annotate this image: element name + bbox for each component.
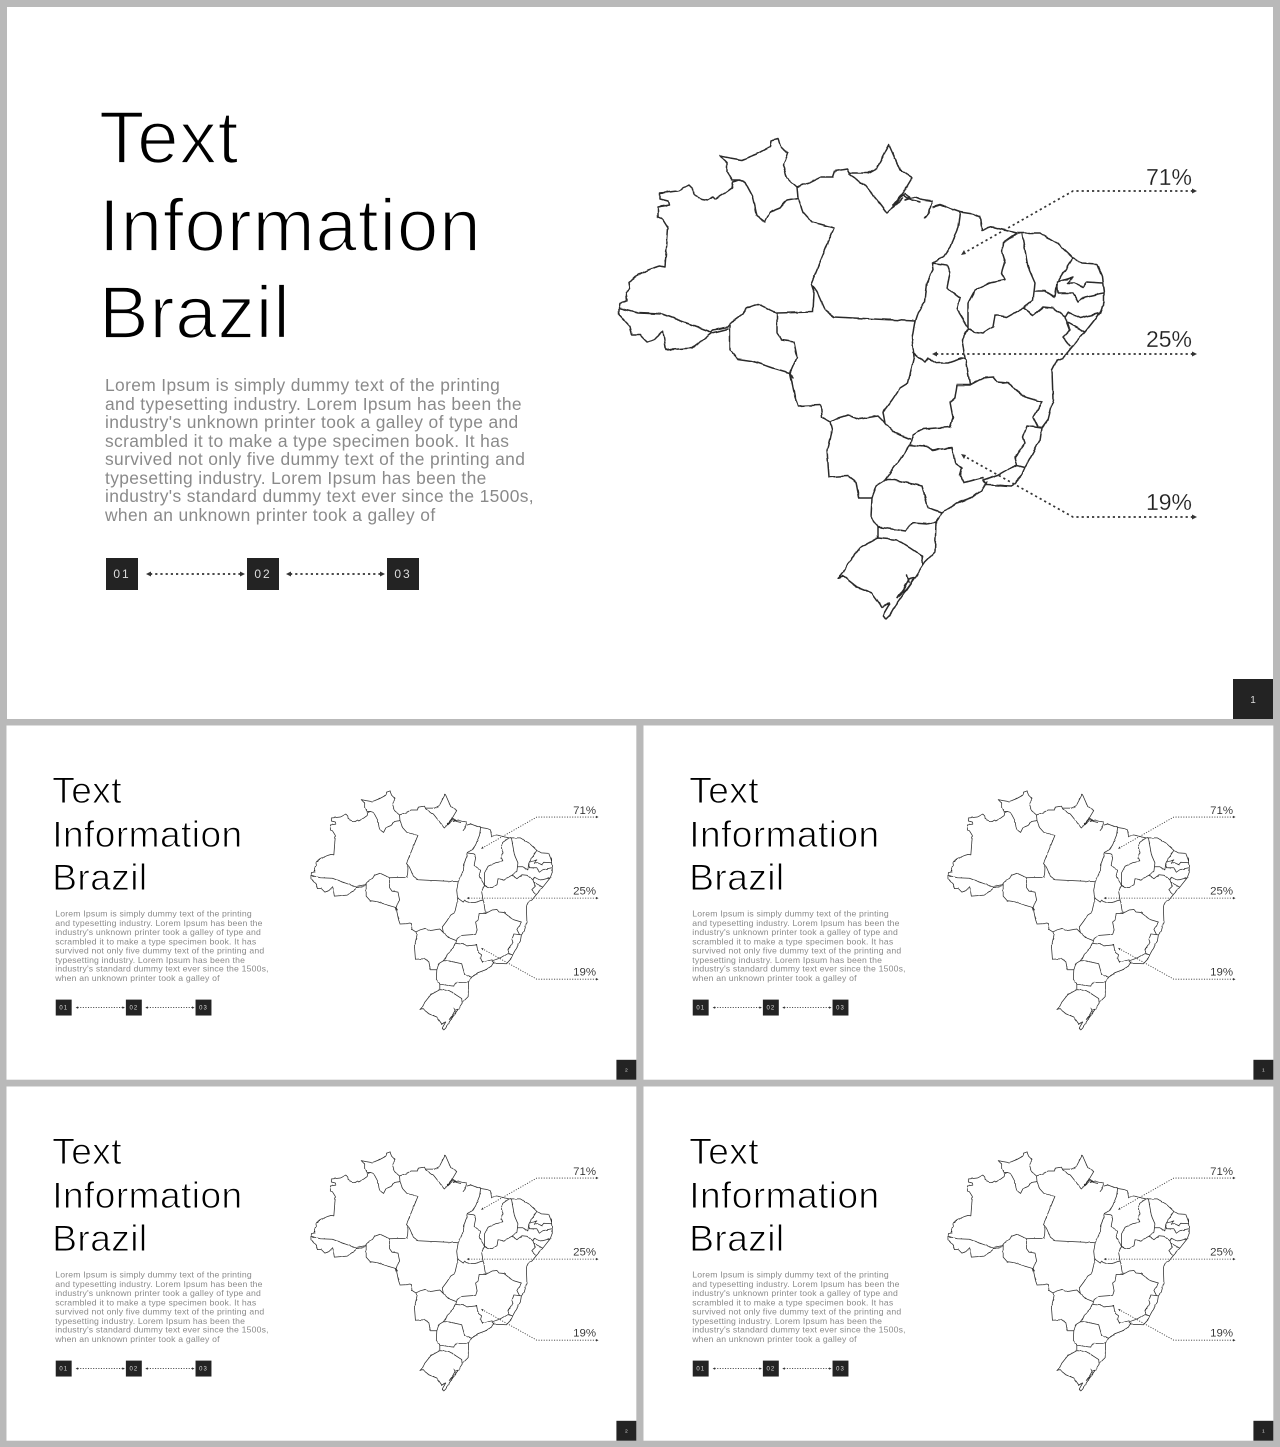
title [689, 770, 880, 898]
panel: thumbnail slide 3 [644, 726, 1274, 1080]
title [689, 1131, 880, 1259]
text block: and typesetting industry. Lorem Ipsum has been the [692, 918, 900, 928]
callout 71% [481, 1166, 599, 1210]
text block: Lorem Ipsum is simply dummy text of the printing [55, 909, 252, 919]
step 01: 01 [696, 1004, 705, 1011]
brazil map [311, 1152, 552, 1391]
text block: when an unknown printer took a galley of [105, 504, 436, 524]
page number: 1 [1262, 1068, 1265, 1073]
text block: and typesetting industry. Lorem Ipsum has been the [55, 1279, 263, 1289]
callout 25% [467, 1247, 599, 1260]
text block: scrambled it to make a type specimen book. It has [105, 430, 509, 450]
step 03 [387, 558, 419, 590]
map chart with callouts [712, 1152, 1236, 1392]
text block: survived not only five dummy text of the printing and [55, 1306, 264, 1316]
title: Text [99, 96, 239, 179]
step 01 [56, 1361, 72, 1377]
callout 71%: 71% [1210, 805, 1233, 817]
callout 71%: 71% [1146, 164, 1192, 190]
step 03: 03 [199, 1004, 208, 1011]
step arrows [713, 1367, 832, 1370]
title: Brazil [52, 1218, 148, 1259]
callout 71% [1118, 1166, 1236, 1210]
title: Information [689, 1174, 880, 1216]
step 02: 02 [767, 1365, 775, 1372]
step 01 [56, 1000, 72, 1016]
text block: industry's standard dummy text ever since the 1500s, [692, 964, 906, 974]
callout 71%: 71% [573, 805, 596, 817]
callout 19% [1118, 948, 1236, 980]
text block: when an unknown printer took a galley of [692, 973, 857, 983]
panel: thumbnail slide 4 [6, 1086, 636, 1441]
step 03: 03 [836, 1004, 845, 1011]
text block: and typesetting industry. Lorem Ipsum has been the [692, 1279, 900, 1289]
text block: industry's unknown printer took a galley of type and [692, 1288, 898, 1298]
text block: Lorem Ipsum is simply dummy text of the printing [105, 375, 500, 395]
callout 71% [1118, 805, 1236, 849]
callout 19%: 19% [1210, 1328, 1233, 1340]
text block: survived not only five dummy text of the printing and [692, 1306, 901, 1316]
map chart with callouts [76, 1152, 598, 1392]
callout 19% [481, 948, 599, 980]
panel: main slide [7, 7, 1273, 719]
step 01: 01 [696, 1365, 705, 1372]
callout 25%: 25% [573, 1247, 596, 1259]
step 01: 01 [59, 1004, 68, 1011]
panel: thumbnail slide 2 [6, 726, 636, 1080]
step 03 [196, 1361, 211, 1377]
step 02: 02 [254, 567, 272, 581]
title: Information [99, 184, 482, 266]
page number [1253, 1421, 1273, 1441]
title: Text [689, 770, 759, 811]
title [99, 96, 482, 354]
callout 25% [1104, 886, 1236, 899]
title: Information [689, 813, 880, 855]
step 02: 02 [767, 1004, 775, 1011]
text block: industry's standard dummy text ever since the 1500s, [55, 964, 269, 974]
title: Text [52, 770, 122, 811]
callout 25%: 25% [1210, 886, 1233, 898]
text block: scrambled it to make a type specimen book. It has [692, 936, 893, 946]
step 01 [106, 558, 138, 590]
page number: 2 [625, 1429, 628, 1434]
text block: industry's standard dummy text ever since the 1500s, [692, 1325, 906, 1335]
page number: 2 [625, 1068, 628, 1073]
brazil map [619, 139, 1104, 619]
step 02: 02 [130, 1365, 138, 1372]
callout 25% [1104, 1247, 1236, 1260]
step 02 [126, 1361, 142, 1377]
text block: typesetting industry. Lorem Ipsum has been the [55, 955, 245, 965]
step 02 [126, 1000, 142, 1016]
text block [692, 1270, 906, 1344]
page number [616, 1421, 636, 1441]
step arrows [713, 1006, 832, 1009]
text block: typesetting industry. Lorem Ipsum has been the [692, 1316, 882, 1326]
page number: 1 [1250, 695, 1256, 706]
callout 71% [481, 805, 599, 849]
step 03: 03 [394, 567, 412, 581]
callout 19% [961, 454, 1197, 520]
callout 25%: 25% [1210, 1247, 1233, 1259]
text block: when an unknown printer took a galley of [55, 973, 220, 983]
callout 71% [961, 164, 1197, 255]
text block: survived not only five dummy text of the printing and [55, 945, 264, 955]
step 01: 01 [113, 567, 131, 581]
text block: scrambled it to make a type specimen book. It has [55, 936, 256, 946]
text block: industry's unknown printer took a galley of type and [55, 1288, 261, 1298]
callout 19%: 19% [1146, 489, 1192, 515]
map chart with callouts [712, 790, 1236, 1030]
page number: 1 [1262, 1429, 1265, 1434]
step 02 [247, 558, 279, 590]
text block: scrambled it to make a type specimen book. It has [55, 1297, 256, 1307]
step 02 [763, 1000, 779, 1016]
text block: scrambled it to make a type specimen book. It has [692, 1297, 893, 1307]
text block [55, 909, 269, 983]
page number [616, 1060, 636, 1080]
step 03: 03 [199, 1365, 208, 1372]
brazil map [948, 791, 1189, 1030]
callout 25% [467, 886, 599, 899]
brazil map [311, 791, 552, 1030]
text block: survived not only five dummy text of the printing and [692, 945, 901, 955]
title: Brazil [52, 857, 148, 898]
callout 19%: 19% [573, 967, 596, 979]
panel: thumbnail slide 5 [644, 1086, 1274, 1441]
callout 19%: 19% [1210, 967, 1233, 979]
title [52, 1131, 243, 1259]
step 01 [693, 1000, 709, 1016]
text block: industry's standard dummy text ever since the 1500s, [55, 1325, 269, 1335]
text block: and typesetting industry. Lorem Ipsum has been the [55, 918, 263, 928]
text block: typesetting industry. Lorem Ipsum has been the [105, 468, 487, 488]
callout 19% [1118, 1309, 1236, 1341]
brazil map [948, 1152, 1189, 1391]
step 03 [196, 1000, 211, 1016]
step 02 [763, 1361, 779, 1377]
title: Text [689, 1131, 759, 1172]
title [52, 770, 243, 898]
callout 71%: 71% [1210, 1166, 1233, 1178]
text block [55, 1270, 269, 1344]
callout 25%: 25% [573, 886, 596, 898]
text block: Lorem Ipsum is simply dummy text of the printing [692, 1270, 889, 1280]
text block: industry's standard dummy text ever since the 1500s, [105, 486, 534, 506]
text block: industry's unknown printer took a galley of type and [55, 927, 261, 937]
step 01 [693, 1361, 709, 1377]
text block: survived not only five dummy text of the printing and [105, 449, 525, 469]
step arrows [76, 1006, 195, 1009]
text block: Lorem Ipsum is simply dummy text of the printing [692, 909, 889, 919]
step 02: 02 [130, 1004, 138, 1011]
text block: industry's unknown printer took a galley of type and [692, 927, 898, 937]
text block: and typesetting industry. Lorem Ipsum has been the [105, 394, 522, 414]
text block [692, 909, 906, 983]
callout 19% [481, 1309, 599, 1341]
map chart with callouts [76, 790, 598, 1030]
page number [1253, 1060, 1273, 1080]
step 03 [833, 1361, 848, 1377]
text block: industry's unknown printer took a galley of type and [105, 412, 519, 432]
title: Brazil [689, 1218, 785, 1259]
text block: when an unknown printer took a galley of [55, 1334, 220, 1344]
page number [1233, 679, 1273, 719]
text block: typesetting industry. Lorem Ipsum has been the [55, 1316, 245, 1326]
title: Text [52, 1131, 122, 1172]
step 01: 01 [59, 1365, 68, 1372]
step arrows [146, 572, 385, 576]
text block [105, 375, 534, 524]
title: Information [52, 1174, 243, 1216]
title: Brazil [99, 271, 291, 354]
callout 71%: 71% [573, 1166, 596, 1178]
callout 19%: 19% [573, 1328, 596, 1340]
step 03: 03 [836, 1365, 845, 1372]
title: Information [52, 813, 243, 855]
text block: typesetting industry. Lorem Ipsum has been the [692, 955, 882, 965]
step 03 [833, 1000, 848, 1016]
text block: when an unknown printer took a galley of [692, 1334, 857, 1344]
title: Brazil [689, 857, 785, 898]
callout 25%: 25% [1146, 326, 1192, 352]
callout 25% [932, 326, 1197, 356]
step arrows [76, 1367, 195, 1370]
text block: Lorem Ipsum is simply dummy text of the printing [55, 1270, 252, 1280]
map chart with callouts [146, 138, 1197, 620]
